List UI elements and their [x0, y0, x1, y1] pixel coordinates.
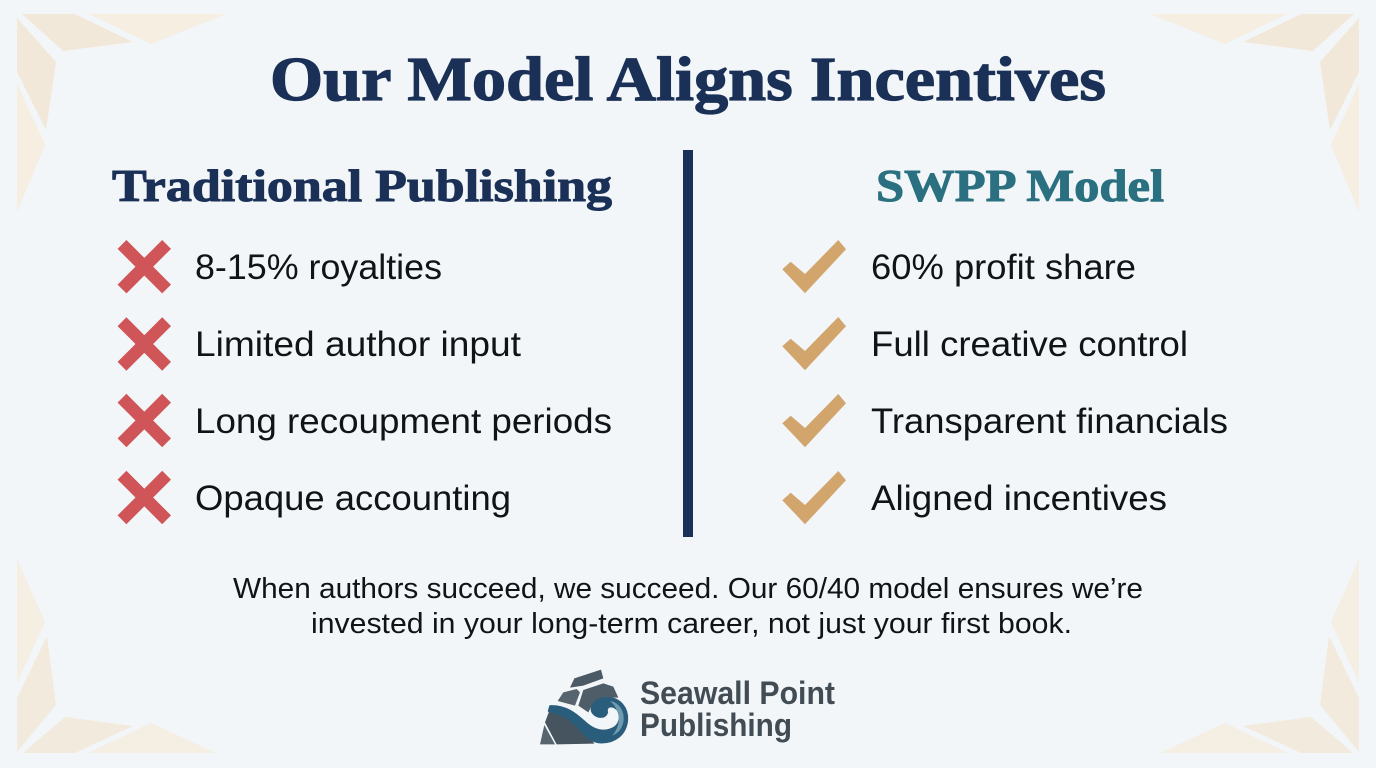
text: author input: Limited author input	[195, 325, 521, 364]
corner ornament: top right	[1150, 14, 1359, 212]
heading: traditional publishing: Traditional Publishing	[112, 161, 613, 211]
caption: When authors succeed, we succeed. Our 60/40 model ensures we’re	[233, 573, 1143, 605]
heading: swpp model: SWPP Model	[876, 161, 1164, 211]
icon: red cross 1	[122, 244, 167, 289]
icon: check 1	[782, 240, 846, 293]
text: creative control: Full creative control	[871, 325, 1188, 364]
text: incentives: Aligned incentives	[871, 479, 1167, 518]
center divider	[683, 150, 693, 537]
icon: red cross 2	[122, 322, 167, 366]
icon: rock and wave	[540, 670, 627, 744]
logo wordmark: Publishing	[640, 707, 792, 743]
panel: traditional publishing	[112, 161, 613, 520]
caption	[233, 573, 1143, 640]
icon: check 3	[782, 394, 846, 447]
caption: invested in your long-term career, not just your first book.	[311, 608, 1072, 640]
corner ornament: bottom right	[1160, 559, 1359, 753]
logo wordmark	[640, 675, 835, 743]
panel: swpp model	[782, 161, 1228, 524]
text: profit share: 60% profit share	[871, 248, 1136, 287]
corner ornament: top left	[17, 14, 226, 212]
icon: check 4	[782, 471, 846, 524]
logo	[540, 670, 835, 744]
icon: red cross 3	[122, 398, 167, 443]
text: accounting: Opaque accounting	[195, 479, 511, 518]
text: recoupment: Long recoupment periods	[195, 402, 612, 441]
logo wordmark: Seawall Point	[640, 675, 835, 711]
text: financials: Transparent financials	[871, 402, 1228, 441]
icon: red cross 4	[122, 475, 167, 520]
title: Our Model Aligns Incentives	[270, 46, 1106, 114]
text: royalties: 8-15% royalties	[195, 248, 442, 287]
icon: check 2	[782, 317, 846, 370]
corner ornament: bottom left	[17, 559, 216, 753]
